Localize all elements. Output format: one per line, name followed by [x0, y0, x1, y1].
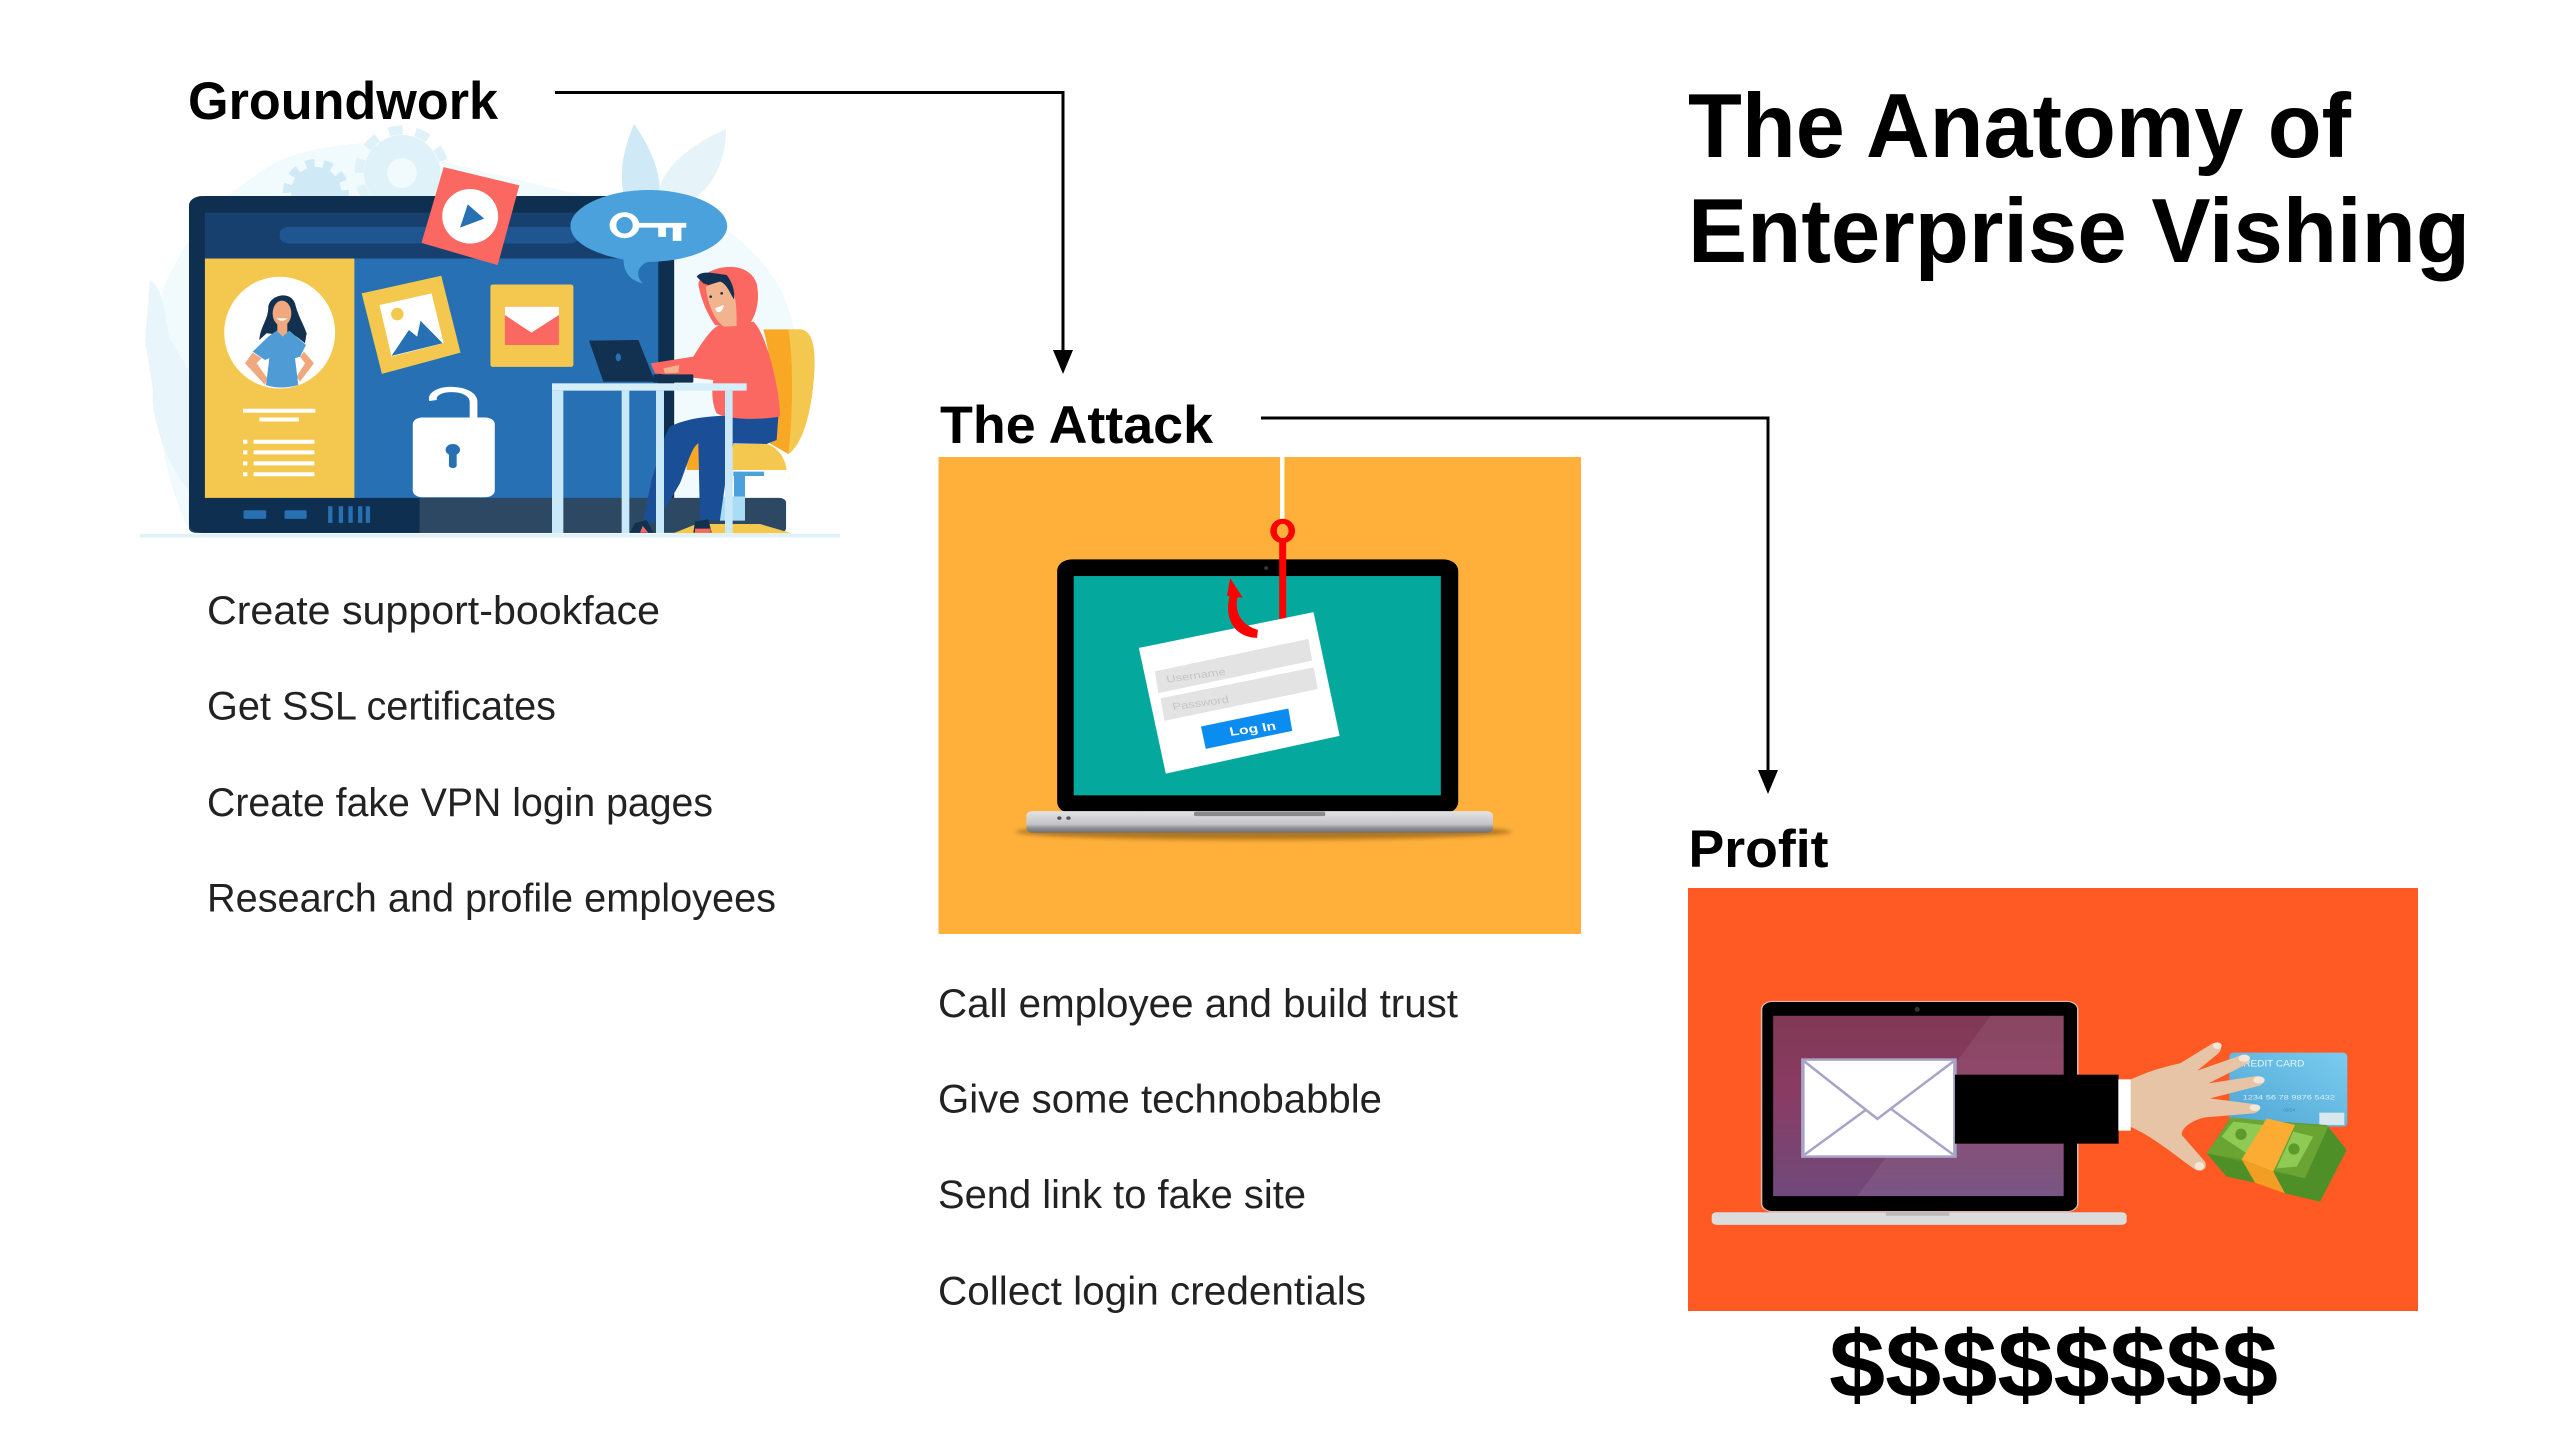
hook barb — [1227, 578, 1258, 638]
list: attack steps: Collect login credentials — [938, 1270, 1366, 1314]
list: groundwork steps: Get SSL certificates — [207, 684, 556, 728]
illustration: groundwork web page on monitor — [140, 167, 840, 537]
shirt cuff — [2118, 1079, 2131, 1131]
list: attack steps: Call employee and build trust — [938, 982, 1458, 1026]
fishing line and hook shank — [1274, 457, 1292, 619]
credit card: 09/24 — [2283, 1108, 2295, 1113]
list: groundwork steps: Create fake VPN login pages — [207, 781, 713, 825]
heading: Profit: Profit — [1688, 820, 1828, 879]
icon: play card — [421, 167, 519, 265]
icon: key speech bubble — [570, 190, 727, 283]
arm sleeve — [1955, 1075, 2119, 1144]
illustration: hacker at desk — [552, 267, 815, 533]
profile sidebar lines — [224, 277, 335, 476]
list: groundwork steps — [207, 589, 776, 920]
list: attack steps — [938, 982, 1458, 1314]
monitor — [189, 196, 786, 533]
arrow: groundwork to attack — [555, 92, 1073, 374]
hand — [2130, 1042, 2265, 1171]
title — [1688, 76, 2470, 282]
icon: open padlock — [413, 389, 495, 497]
cash bundle — [2207, 1117, 2347, 1202]
icon: image card — [362, 276, 461, 374]
heading: The Attack: The Attack — [940, 396, 1214, 455]
credit card — [2229, 1053, 2347, 1127]
chair — [673, 329, 815, 533]
illustration: phishing hook and laptop — [1016, 457, 1511, 840]
credit card: 1234 56 78 9876 5432 — [2243, 1095, 2336, 1101]
list: attack steps: Give some technobabble — [938, 1078, 1382, 1122]
fake login card: Username — [1165, 666, 1227, 685]
icon: woman avatar — [245, 295, 314, 387]
title: Enterprise Vishing — [1688, 181, 2470, 282]
hacker figure — [630, 267, 780, 533]
icon: envelope — [1803, 1060, 1955, 1157]
illustration background: gears, leaves and pale blob — [145, 124, 795, 530]
fake login card — [1139, 612, 1340, 774]
list: groundwork steps: Create support-bookface — [207, 589, 660, 633]
laptop — [1712, 1001, 2127, 1225]
icon: mail card — [490, 284, 573, 367]
arrow: attack to profit — [1261, 418, 1778, 794]
heading: Groundwork: Groundwork — [188, 72, 499, 131]
panel: attack image — [938, 457, 1581, 934]
laptop and desk — [552, 340, 747, 533]
title: The Anatomy of — [1688, 76, 2352, 177]
credit card: CREDIT CARD — [2236, 1059, 2305, 1069]
fake login card: Log In — [1228, 719, 1277, 738]
illustration: hand, credit card and cash — [2118, 1042, 2347, 1202]
panel: profit image — [1688, 888, 2418, 1311]
dollar signs: $$$$$$$$ — [1829, 1312, 2278, 1418]
list: groundwork steps: Research and profile employees — [207, 876, 776, 920]
illustration: laptop with envelope and sleeve — [1712, 1001, 2127, 1225]
list: attack steps: Send link to fake site — [938, 1173, 1306, 1217]
laptop — [1016, 559, 1511, 840]
fake login card: Password — [1171, 694, 1230, 713]
